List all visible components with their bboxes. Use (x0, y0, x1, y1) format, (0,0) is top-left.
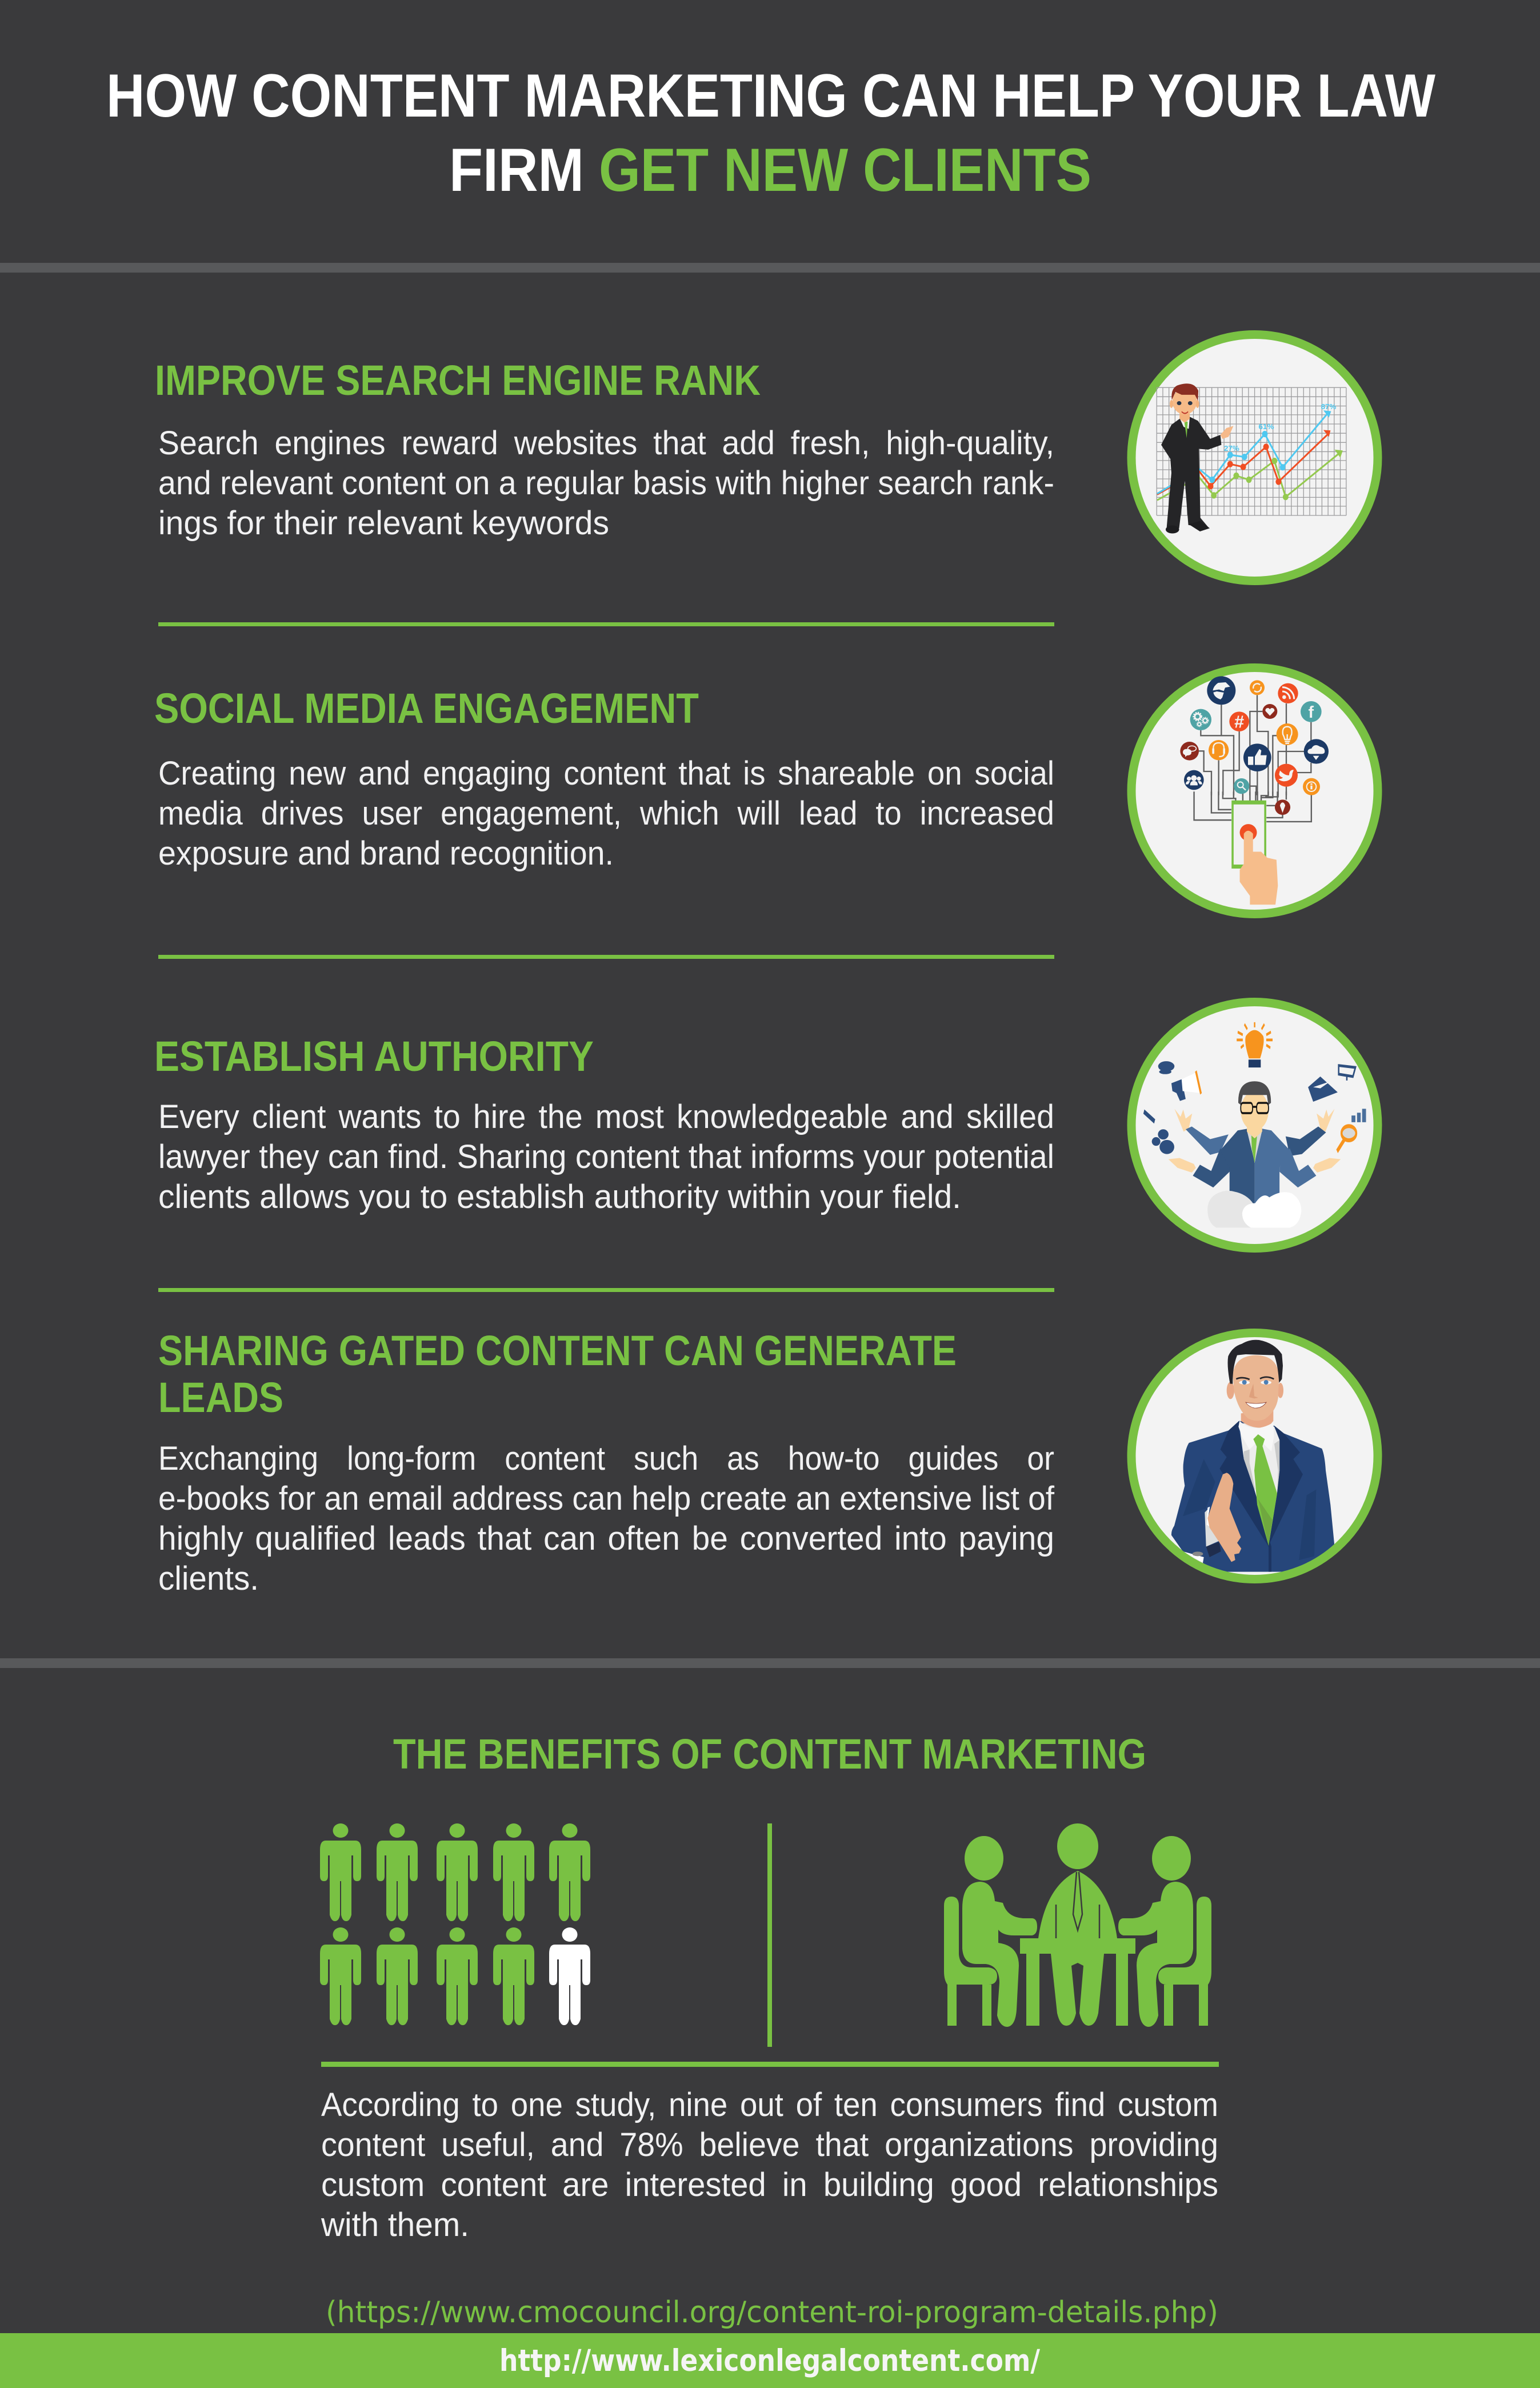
text block: every client (158, 1098, 1054, 1215)
text block: search engines: ings for their relevant keywords (158, 505, 609, 542)
footer bar: http://www.lexiconlegalcontent.com/ (499, 2343, 1041, 2378)
icon: presenter with line chart (1131, 335, 1378, 581)
heading: improve search engine rank: IMPROVE SEARCH ENGINE RANK (155, 357, 761, 404)
heading: sharing gated content can generate leads: SHARING GATED CONTENT CAN GENERATE (158, 1327, 957, 1374)
heading: sharing gated content can generate leads: LEADS (158, 1374, 283, 1421)
panel: sharing gated content (158, 1327, 1378, 1597)
icon: businessman handshake (1131, 1333, 1378, 1579)
text block: exchanging long-form content (158, 1440, 1055, 1597)
text block: every client: clients allows you to establish authority within your field. (158, 1178, 961, 1215)
title: FIRM (449, 135, 584, 204)
icon: social network phone: f (1309, 703, 1314, 722)
text block: exchanging long-form content: e-books for an email address can help create an extensive list of (158, 1480, 1055, 1517)
icon: social network phone: # (1234, 713, 1244, 732)
title (106, 61, 1435, 204)
text block: every client: lawyer they can find. Sharing content that informs your potential (158, 1138, 1054, 1175)
panel: establish authority (154, 1002, 1378, 1292)
title: GET NEW CLIENTS (599, 135, 1091, 204)
text block: exchanging long-form content: Exchanging long-form content such as how-to guides or (158, 1440, 1054, 1477)
panel: benefits of content marketing (320, 1730, 1219, 2330)
icon: presenter with line chart: 87% (1321, 403, 1337, 411)
icon: presenter with line chart: 61% (1258, 423, 1274, 431)
text block: search engines: Search engines reward websites that add fresh, high-quality, (158, 425, 1054, 462)
heading: social media engagement: SOCIAL MEDIA ENGAGEMENT (154, 685, 699, 732)
text block: creating new content: Creating new and engaging content that is shareable on social (158, 755, 1054, 792)
heading: benefits of content marketing: THE BENEFITS OF CONTENT MARKETING (393, 1730, 1146, 1778)
icon: social network phone (1131, 667, 1378, 914)
text block: creating new content (158, 755, 1054, 872)
text block: search engines (158, 425, 1054, 542)
text block: study statistics: with them. (321, 2206, 469, 2243)
text block: exchanging long-form content: clients. (158, 1560, 259, 1597)
panel: social media engagement (154, 667, 1378, 959)
footer bar (0, 2333, 1540, 2388)
icon: business meeting at table (944, 1823, 1211, 2027)
source citation: (https://www.cmocouncil.org/content-roi-program-details.php) (326, 2295, 1218, 2330)
text block: search engines: and relevant content on a regular basis with higher search rank- (158, 465, 1054, 502)
text block: every client: Every client wants to hire the most knowledgeable and skilled (158, 1098, 1054, 1135)
text block: exchanging long-form content: highly qualified leads that can often be converted into paying (158, 1520, 1054, 1557)
text block: creating new content: exposure and brand recognition. (158, 835, 614, 872)
panel: improve search engine rank (155, 335, 1378, 626)
text block: study statistics (321, 2086, 1218, 2243)
heading: establish authority: ESTABLISH AUTHORITY (154, 1033, 594, 1080)
icon: presenter with line chart: 27% (1224, 445, 1240, 453)
text block: study statistics: content useful, and 78% believe that organizations providing (321, 2126, 1218, 2163)
icon: multitasking businessman (1131, 1002, 1378, 1248)
icon group: nine of ten people (320, 1823, 590, 2025)
text block: study statistics: custom content are interested in building good relationships (321, 2166, 1218, 2203)
text block: study statistics: According to one study, nine out of ten consumers find custom (321, 2086, 1218, 2123)
heading: sharing gated content can generate leads (158, 1327, 957, 1421)
text block: creating new content: media drives user engagement, which will lead to increased (158, 795, 1054, 832)
